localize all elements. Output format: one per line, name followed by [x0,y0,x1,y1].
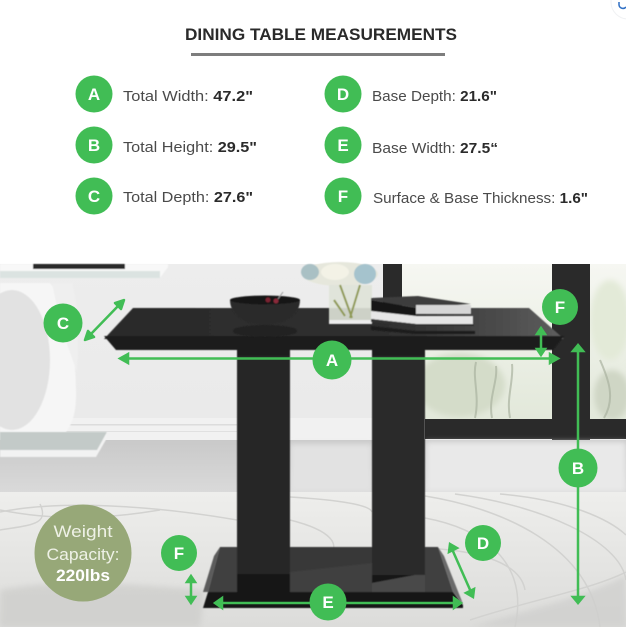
marker B: B [572,459,584,478]
rug [0,492,626,627]
marker D [465,525,501,561]
bowl [230,292,300,337]
marker E: E [322,593,334,612]
legend item D: Base Depth: 21.6" [372,88,497,105]
legs [237,348,425,592]
legend item B: B [88,136,100,155]
arrow: width A [120,354,558,363]
arrow: base depth D [449,544,474,597]
marker F top: F [555,298,565,317]
legend [76,76,588,214]
flowers and vase [301,262,378,324]
weight capacity badge [34,504,132,602]
legend item E [324,126,498,164]
arrow: tabletop thickness F [537,328,545,355]
legend item B [76,126,257,164]
legend item C: C [88,187,100,206]
arrow: height B [573,345,583,603]
legend item D: D [337,85,349,104]
base [203,547,463,608]
marker B [558,448,598,488]
legend item F: Surface & Base Thickness: 1.6" [373,190,588,207]
white console table [0,264,168,457]
legend item E: Base Width: 27.5“ [372,140,498,157]
arrow: base width E [215,598,461,608]
marker E [310,584,346,620]
window panes [402,264,626,420]
legend item F: F [338,187,348,206]
marker A [312,340,352,380]
marker F bottom: F [174,544,184,563]
legend item A [76,76,253,112]
weight capacity badge: 220lbs [56,566,110,585]
marker A: A [326,351,338,370]
skirting [60,418,425,440]
marker F bottom [161,535,197,571]
arrow: depth C [85,300,124,340]
tabletop [104,308,564,350]
marker D: D [477,534,489,553]
weight capacity badge: Capacity: [46,545,120,564]
dining table [104,308,564,608]
legend item D [324,76,497,112]
marker C [44,304,82,342]
floor [0,440,626,494]
marker F top [542,289,578,325]
tabletop decor [230,262,475,337]
title: DINING TABLE MEASUREMENTS [185,25,457,44]
legend item A: A [88,85,100,104]
legend item E: E [337,136,349,155]
title underline [191,53,445,56]
marker C: C [57,314,69,333]
legend item A: Total Width: 47.2" [123,88,253,105]
legend item C: Total Depth: 27.6" [123,189,253,206]
legend item F [324,178,588,214]
room photo background [0,264,626,627]
books [371,296,475,334]
arrow: base thickness F [187,576,195,603]
weight capacity badge: Weight [54,522,113,541]
corner badge [611,0,626,19]
window frame [383,264,626,440]
legend item C [76,178,253,214]
legend item B: Total Height: 29.5" [123,139,257,156]
